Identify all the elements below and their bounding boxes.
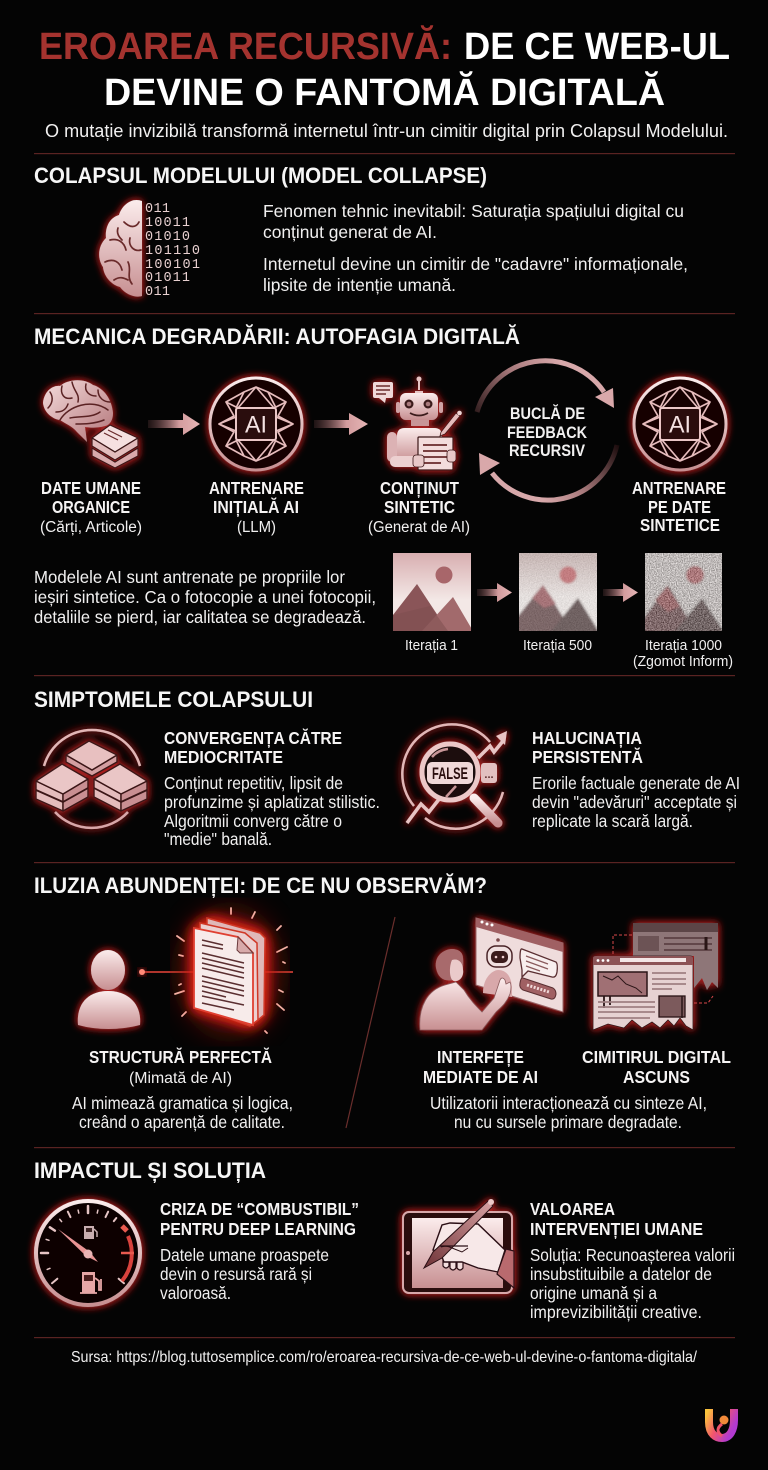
arrow (148, 413, 200, 435)
divider slash (346, 917, 395, 1128)
text: convergenta (164, 727, 380, 849)
text: halucinatia: devin "adevăruri" acceptate și (532, 792, 737, 812)
valoarea heading: INTERVENȚIEI UMANE (530, 1219, 703, 1239)
icon: brain with binary code: 01010 (145, 230, 190, 245)
icon: AI chip circle 2 (634, 378, 726, 470)
text: structura perfecta: creând o aparență de calitate. (79, 1112, 285, 1132)
arrow (603, 583, 638, 602)
text: criza de combustibil: valoroasă. (160, 1283, 231, 1303)
text: utilizatorii: nu cu sursele primare degradate. (454, 1112, 682, 1132)
captions: iterations: Iterația 500 (523, 638, 592, 654)
text: convergenta: Conținut repetitiv, lipsit de (164, 773, 343, 793)
valoarea heading: VALOAREA (530, 1199, 615, 1219)
label: interfete mediate: MEDIATE DE AI (423, 1067, 538, 1087)
icon: magnifier false (402, 724, 507, 829)
heading: impactul si solutia: IMPACTUL ȘI SOLUȚIA (34, 1158, 266, 1183)
text: valoarea interventiei umane (530, 1199, 735, 1322)
halucinatia heading: PERSISTENTĂ (532, 746, 643, 767)
text: valoarea interventiei umane: imprevizibilității creative. (530, 1302, 702, 1322)
label: interfete mediate: INTERFEȚE (437, 1047, 524, 1067)
icon: magnifier false: FALSE (432, 764, 468, 783)
label: cimitirul digital: ASCUNS (623, 1067, 690, 1087)
label: continut sintetic: CONȚINUT (380, 478, 459, 498)
title: EROAREA RECURSIVĂ: (39, 24, 452, 68)
text: halucinatia (532, 728, 740, 831)
icon: brain with binary code: 100101 (145, 258, 200, 273)
feedback loop (477, 361, 617, 500)
heading: colapsul modelului: COLAPSUL MODELULUI (MODEL COLLAPSE) (34, 163, 487, 188)
arrow (477, 583, 512, 602)
halucinatia heading: HALUCINAȚIA (532, 728, 642, 748)
text: criza de combustibil: devin o resursă rară și (160, 1264, 312, 1284)
text block: photocopy explanation (34, 567, 376, 627)
captions: iterations (405, 638, 733, 670)
captions: iterations: (Zgomot Inform) (633, 654, 733, 670)
text: convergenta: Algoritmii converg către o (164, 811, 342, 831)
captions: iterations: Iterația 1 (405, 638, 458, 654)
text: halucinatia: Erorile factuale generate de AI (532, 773, 740, 793)
label: antrenare initiala: (LLM) (237, 519, 276, 536)
text: valoarea interventiei umane: insubstituibile a datelor de (530, 1264, 712, 1284)
text: utilizatorii: Utilizatorii interacționează cu sinteze AI, (430, 1093, 707, 1113)
text block: model collapse description: Fenomen tehnic inevitabil: Saturația spațiului digital cu (263, 201, 684, 221)
label: antrenare pe date sintetice: SINTETICE (640, 515, 720, 535)
text block: model collapse description (263, 201, 688, 295)
icon: brain and books (43, 380, 138, 468)
loop label: BUCLĂ DE (510, 404, 585, 423)
icon: magnifier false: ... (484, 769, 494, 781)
icon: brain with binary code: 011 (145, 285, 170, 300)
label: antrenare pe date sintetice: PE DATE (648, 497, 711, 517)
text block: photocopy explanation: ieșiri sintetice. Ca o fotocopie a unei fotocopii, (34, 587, 376, 607)
text: structura perfecta: AI mimează gramatica și logica, (72, 1093, 293, 1113)
label: continut sintetic: (Generat de AI) (368, 519, 470, 536)
convergenta heading: CONVERGENȚA CĂTRE (164, 727, 342, 748)
text: convergenta: "medie" banală. (164, 829, 272, 849)
text block: photocopy explanation: detaliile se pierd, iar calitatea se degradează. (34, 607, 366, 627)
text block: model collapse description: conținut generat de AI. (263, 222, 437, 242)
heading: simptomele: SIMPTOMELE COLAPSULUI (34, 687, 313, 712)
label: date umane: DATE UMANE (41, 478, 141, 498)
label: date umane: ORGANICE (52, 497, 130, 517)
title: DEVINE O FANTOMĂ DIGITALĂ (104, 70, 665, 114)
text: structura perfecta (72, 1046, 293, 1132)
label: date umane (40, 478, 142, 536)
label: antrenare pe date sintetice (632, 478, 726, 535)
label: continut sintetic (368, 478, 470, 536)
icon: AI chip circle 2: AI (669, 412, 691, 438)
icon: brain with binary code (99, 200, 200, 300)
heading: mecanica degradarii: MECANICA DEGRADĂRII: AUTOFAGIA DIGITALĂ (34, 324, 520, 349)
icon: brain with binary code: 10011 (145, 216, 190, 231)
text: criza de combustibil: Datele umane proaspete (160, 1245, 329, 1265)
label: antrenare pe date sintetice: ANTRENARE (632, 478, 726, 498)
image: iteration 1 (393, 553, 473, 631)
text block: photocopy explanation: Modelele AI sunt antrenate pe propriile lor (34, 567, 345, 587)
loop label: FEEDBACK (507, 424, 587, 442)
icon: hidden digital graveyard (593, 923, 718, 1030)
label: antrenare initiala: ANTRENARE (209, 478, 304, 498)
label: cimitirul digital: CIMITIRUL DIGITAL (582, 1047, 731, 1067)
image: iteration 1000 (645, 553, 722, 631)
icon: logo (709, 1409, 734, 1438)
icon: AI chip circle 1 (210, 378, 302, 470)
loop label (507, 404, 587, 460)
convergenta heading (164, 727, 342, 767)
icon: person with AI interface (420, 918, 563, 1030)
text: structura perfecta: (Mimată de AI) (129, 1070, 232, 1087)
criza heading (160, 1199, 359, 1239)
loop label: RECURSIV (509, 442, 585, 460)
beam of light (139, 969, 293, 975)
text: convergenta: profunzime și aplatizat stilistic. (164, 792, 380, 812)
heading: iluzia abundentei: ILUZIA ABUNDENȚEI: DE CE NU OBSERVĂM? (34, 873, 487, 898)
image: iteration 500 (519, 553, 597, 631)
label: continut sintetic: SINTETIC (384, 497, 455, 517)
icon: glowing document stack (175, 908, 287, 1034)
text block: model collapse description: Internetul devine un cimitir de "cadavre" informaționale, (263, 254, 688, 274)
title (39, 24, 730, 114)
captions: iterations: Iterația 1000 (645, 638, 722, 654)
text: criza de combustibil (160, 1199, 359, 1303)
criza heading: PENTRU DEEP LEARNING (160, 1219, 356, 1239)
subtitle: O mutație invizibilă transformă internetul într-un cimitir digital prin Colapsul Modelului. (45, 120, 728, 141)
icon: fuel gauge (36, 1201, 140, 1305)
valoarea heading (530, 1199, 703, 1239)
label: antrenare initiala: INIȚIALĂ AI (213, 496, 299, 517)
text: utilizatorii (430, 1093, 707, 1132)
text: valoarea interventiei umane: Soluția: Recunoașterea valorii (530, 1245, 735, 1265)
icon: brain with binary code: 101110 (145, 244, 200, 259)
icon: AI chip circle 1: AI (245, 412, 267, 438)
label: interfete mediate (423, 1047, 538, 1087)
text: structura perfecta: STRUCTURĂ PERFECTĂ (89, 1046, 272, 1067)
icon: hand writing on tablet (403, 1199, 514, 1293)
label: antrenare initiala (209, 478, 304, 536)
label: cimitirul digital (582, 1047, 731, 1087)
arrow (314, 413, 368, 435)
icon: stacked blocks (36, 730, 147, 828)
source line: Sursa: https://blog.tuttosemplice.com/ro/eroarea-recursiva-de-ce-web-ul-devine-o-fantoma-digitala/ (71, 1349, 697, 1366)
icon: robot writing (373, 376, 462, 470)
criza heading: CRIZA DE “COMBUSTIBIL” (160, 1199, 359, 1219)
title: DE CE WEB-UL (464, 26, 730, 68)
label: date umane: (Cărți, Articole) (40, 519, 142, 536)
halucinatia heading (532, 728, 643, 767)
icon: brain with binary code: 01011 (145, 271, 190, 286)
text: halucinatia: replicate la scară largă. (532, 811, 693, 831)
icon: person (78, 950, 140, 1029)
text: valoarea interventiei umane: origine umană și a (530, 1283, 657, 1303)
text block: model collapse description: lipsite de intenție umană. (263, 275, 456, 295)
convergenta heading: MEDIOCRITATE (164, 747, 283, 767)
icon: brain with binary code: 011 (145, 202, 170, 217)
